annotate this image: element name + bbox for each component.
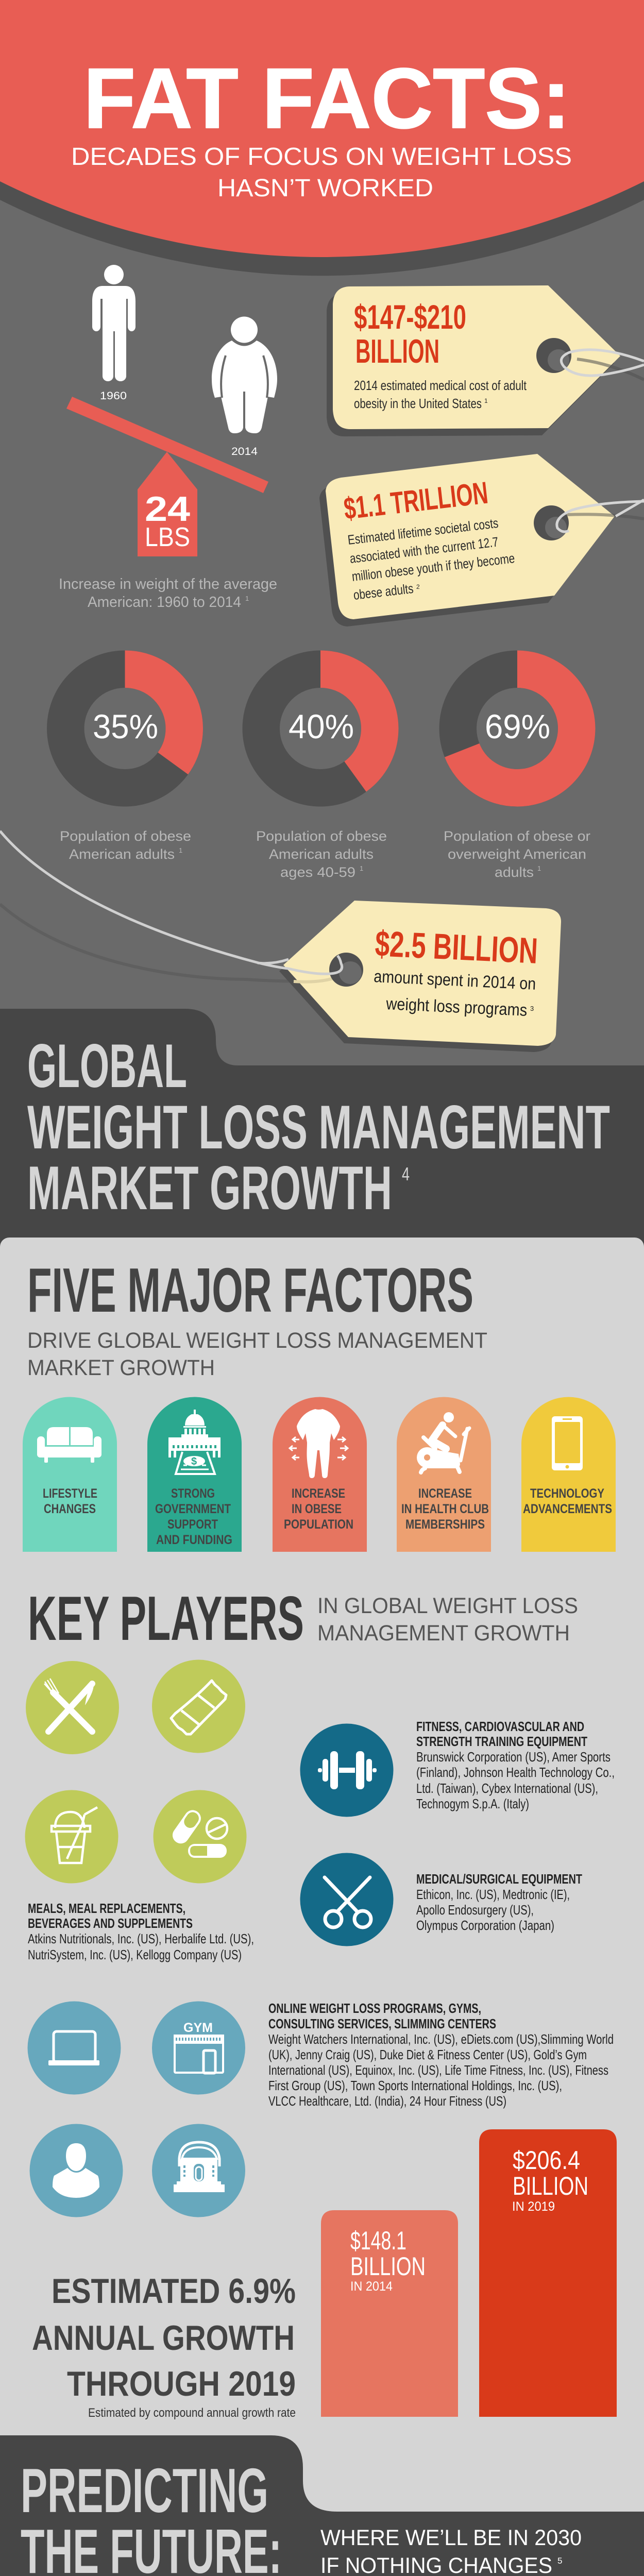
- icon: consultant: [30, 2124, 123, 2217]
- factor: increase in obese population: IN OBESE: [292, 1502, 342, 1516]
- price tag 1: medical cost: [327, 285, 644, 436]
- text: online programs and gyms: ONLINE WEIGHT LOSS PROGRAMS, GYMS,: [268, 2001, 481, 2016]
- header band shadow: [0, 0, 644, 276]
- heading: predicting the future: 5: [557, 2556, 562, 2566]
- factor: lifestyle changes: [23, 1397, 117, 1552]
- donut chart 35%: [65, 669, 184, 788]
- factor: health club memberships: MEMBERSHIPS: [405, 1517, 485, 1532]
- title: HASN’T WORKED: [217, 175, 433, 202]
- price tag 2: societal costs: 2: [416, 583, 420, 590]
- icon: exercise bike: [417, 1412, 469, 1472]
- price tag 3: weight loss programs: $2.5 BILLION: [374, 923, 539, 971]
- donut chart 40%: 40%: [289, 707, 354, 745]
- price tag 1: medical cost: 2014 estimated medical cost of adult: [354, 378, 527, 393]
- text: meals and supplements: BEVERAGES AND SUPPLEMENTS: [28, 1916, 193, 1931]
- price tag 2: societal costs: associated with the current 12.7: [349, 534, 499, 566]
- icon: meal bar: [152, 1660, 245, 1753]
- icon: thin person 1960: 1960: [100, 390, 127, 402]
- caption: weight increase: American: 1960 to 2014: [88, 594, 241, 611]
- header red banner: [0, 0, 644, 257]
- caption: obese or overweight: [444, 828, 590, 880]
- text: medical equipment: Ethicon, Inc. (US), Medtronic (IE),: [416, 1887, 570, 1902]
- long string shadow: [0, 904, 330, 981]
- icon: smartphone: [552, 1416, 583, 1470]
- bar: 2019 market size: $206.4: [513, 2146, 580, 2175]
- caption: weight increase: 1: [245, 595, 249, 602]
- text: estimated annual growth: ESTIMATED 6.9%: [52, 2272, 296, 2311]
- heading: global weight loss management market growth: MARKET GROWTH: [27, 1154, 392, 1223]
- bar: 2019 market size: BILLION: [513, 2172, 588, 2200]
- factor: technology advancements: TECHNOLOGY: [530, 1486, 604, 1501]
- factor: technology advancements: [521, 1397, 616, 1552]
- icon: dumbbell: [300, 1724, 394, 1817]
- text: estimated annual growth: ANNUAL GROWTH: [32, 2318, 295, 2358]
- heading: predicting the future: PREDICTING: [21, 2455, 268, 2526]
- icon: scissors: [300, 1853, 394, 1946]
- caption: obese or overweight: adults: [495, 865, 534, 880]
- price tag 3: weight loss programs: [279, 901, 561, 1052]
- factor: increase in obese population: [273, 1397, 367, 1552]
- weight gain pointer 24 LBS: LBS: [145, 522, 190, 552]
- factor: government support: STRONG: [171, 1486, 215, 1501]
- text: online programs and gyms: First Group (US), Town Sports International Holdings, Inc. (US),: [268, 2078, 562, 2093]
- weight gain pointer 24 LBS: [138, 452, 197, 556]
- text: online programs and gyms: [268, 2001, 614, 2109]
- factor: government support: [147, 1397, 242, 1552]
- caption: adults ages 40-59: ages 40-59: [280, 865, 355, 880]
- text: meals and supplements: NutriSystem, Inc. (US), Kellogg Company (US): [28, 1947, 242, 1962]
- title: FAT FACTS:: [83, 51, 570, 146]
- title: [71, 51, 572, 202]
- caption: obese or overweight: 1: [537, 865, 541, 872]
- factor: government support: GOVERNMENT: [155, 1502, 231, 1516]
- panel: top statistics background: [0, 0, 644, 1082]
- donut chart 69%: [458, 669, 577, 788]
- heading: five major factors: DRIVE GLOBAL WEIGHT LOSS MANAGEMENT: [27, 1328, 487, 1353]
- heading: predicting the future: [21, 2455, 582, 2576]
- icon: fork and knife: [26, 1661, 119, 1754]
- price tag 3: weight loss programs: amount spent in 2014 on: [374, 967, 536, 993]
- heading: predicting the future: WHERE WE’LL BE IN 2030: [320, 2526, 582, 2550]
- caption: adults ages 40-59: American adults: [269, 846, 374, 862]
- text: medical equipment: MEDICAL/SURGICAL EQUIPMENT: [416, 1871, 582, 1887]
- price tag 1: medical cost: 1: [484, 397, 488, 404]
- heading: key players: MANAGEMENT GROWTH: [317, 1621, 570, 1646]
- caption: obese or overweight: overweight American: [448, 846, 586, 862]
- panel: light factors and players section: [0, 1238, 644, 2520]
- heading: global weight loss management market growth: [27, 1031, 610, 1223]
- donut chart 35%: 35%: [93, 707, 158, 745]
- caption: population of obese adults: [60, 828, 191, 862]
- price tag 1: medical cost: $147-$210: [354, 298, 466, 336]
- factor: increase in obese population: POPULATION: [284, 1517, 353, 1532]
- text: meals and supplements: [28, 1901, 254, 1962]
- icon: sofa: [37, 1427, 101, 1463]
- factor: technology advancements: ADVANCEMENTS: [523, 1502, 612, 1516]
- caption: adults ages 40-59: [256, 828, 387, 880]
- icon: protein shake: [25, 1790, 118, 1884]
- panel: predicting the future: [0, 2435, 644, 2576]
- text: online programs and gyms: VLCC Healthcare, Ltd. (India), 24 Hour Fitness (US): [268, 2093, 506, 2109]
- caption: obese or overweight: Population of obese or: [444, 828, 590, 844]
- icon: thin person 1960: [92, 265, 135, 402]
- donut chart 40%: [261, 669, 380, 788]
- caption: weight increase: Increase in weight of the average: [59, 576, 277, 592]
- weight gain pointer 24 LBS: 24: [145, 489, 190, 529]
- factor: health club memberships: IN HEALTH CLUB: [401, 1502, 489, 1516]
- heading: global weight loss management market growth: 4: [402, 1163, 410, 1184]
- heading: key players: IN GLOBAL WEIGHT LOSS: [317, 1594, 578, 1618]
- text: fitness equipment: STRENGTH TRAINING EQUIPMENT: [416, 1734, 587, 1749]
- price tag 1: medical cost: obesity in the United States: [354, 396, 482, 411]
- bar: 2014 market size: [321, 2210, 458, 2417]
- price tag 2: societal costs: obese adults: [352, 581, 414, 603]
- icon: heavy person 2014: 2014: [231, 446, 258, 457]
- price tag 2: societal costs: Estimated lifetime societal costs: [347, 515, 499, 548]
- title: DECADES OF FOCUS ON WEIGHT LOSS: [71, 143, 572, 171]
- text: fitness equipment: FITNESS, CARDIOVASCULAR AND: [416, 1719, 584, 1734]
- text: fitness equipment: [416, 1719, 615, 1811]
- heading: five major factors: MARKET GROWTH: [27, 1355, 215, 1380]
- price tag 2: societal costs: $1.1 TRILLION: [342, 476, 490, 526]
- bar: 2019 market size: IN 2019: [512, 2199, 555, 2214]
- icon: expanding body: [290, 1409, 348, 1478]
- price tag 2: societal costs: [319, 454, 644, 626]
- factor: health club memberships: [397, 1397, 491, 1552]
- text: estimated annual growth: Estimated by compound annual growth rate: [88, 2406, 296, 2420]
- donut chart 69%: 69%: [485, 707, 550, 745]
- heading: key players: KEY PLAYERS: [28, 1583, 304, 1653]
- text: estimated annual growth: THROUGH 2019: [67, 2364, 296, 2403]
- heading: global weight loss management market growth: GLOBAL: [27, 1031, 187, 1100]
- factor: increase in obese population: INCREASE: [292, 1486, 345, 1501]
- caption: population of obese adults: 1: [179, 846, 182, 854]
- heading: five major factors: [27, 1255, 487, 1380]
- text: medical equipment: Apollo Endosurgery (US),: [416, 1902, 534, 1918]
- price tag 3: weight loss programs: 3: [530, 1005, 534, 1012]
- factor: health club memberships: INCREASE: [418, 1486, 472, 1501]
- text: medical equipment: [416, 1871, 582, 1933]
- icon: capitol building: [168, 1410, 221, 1474]
- icon: laptop: [28, 2001, 121, 2095]
- seesaw beam: [66, 397, 268, 493]
- price tag 2: societal costs: million obese youth if they become: [351, 550, 516, 584]
- factor: lifestyle changes: CHANGES: [44, 1502, 96, 1516]
- icon: gym: [152, 2001, 245, 2095]
- caption: adults ages 40-59: Population of obese: [256, 828, 387, 844]
- factor: government support: AND FUNDING: [156, 1533, 232, 1547]
- text: fitness equipment: Ltd. (Taiwan), Cybex International (US),: [416, 1781, 598, 1796]
- icon: slimming center: [152, 2124, 245, 2217]
- icon: heavy person 2014: [212, 316, 277, 457]
- factor: government support: SUPPORT: [167, 1517, 218, 1532]
- text: fitness equipment: Technogym S.p.A. (Italy): [416, 1796, 529, 1811]
- caption: population of obese adults: Population of obese: [60, 828, 191, 844]
- bar: 2019 market size: [479, 2129, 617, 2417]
- text: medical equipment: Olympus Corporation (Japan): [416, 1918, 554, 1933]
- price tag 3: weight loss programs: weight loss programs: [385, 994, 528, 1020]
- price tag 1: medical cost: BILLION: [355, 332, 439, 370]
- caption: weight increase: [59, 576, 277, 611]
- caption: population of obese adults: American adults: [69, 846, 175, 862]
- text: online programs and gyms: CONSULTING SERVICES, SLIMMING CENTERS: [268, 2016, 496, 2031]
- caption: adults ages 40-59: 1: [360, 865, 363, 872]
- bar: 2014 market size: IN 2014: [350, 2279, 393, 2294]
- bar: 2014 market size: BILLION: [350, 2252, 426, 2281]
- icon: pills and supplements: [154, 1790, 246, 1884]
- text: estimated annual growth: [32, 2272, 296, 2420]
- text: meals and supplements: MEALS, MEAL REPLACEMENTS,: [28, 1901, 185, 1916]
- text: meals and supplements: Atkins Nutritionals, Inc. (US), Herbalife Ltd. (US),: [28, 1931, 254, 1946]
- panel: global market growth heading: [0, 1009, 644, 1262]
- factor: lifestyle changes: LIFESTYLE: [43, 1486, 97, 1501]
- bar: 2014 market size: $148.1: [350, 2226, 406, 2255]
- string through tag 3: [0, 831, 342, 974]
- icon: capitol building: $: [191, 1456, 197, 1467]
- icon: gym: GYM: [183, 2021, 213, 2035]
